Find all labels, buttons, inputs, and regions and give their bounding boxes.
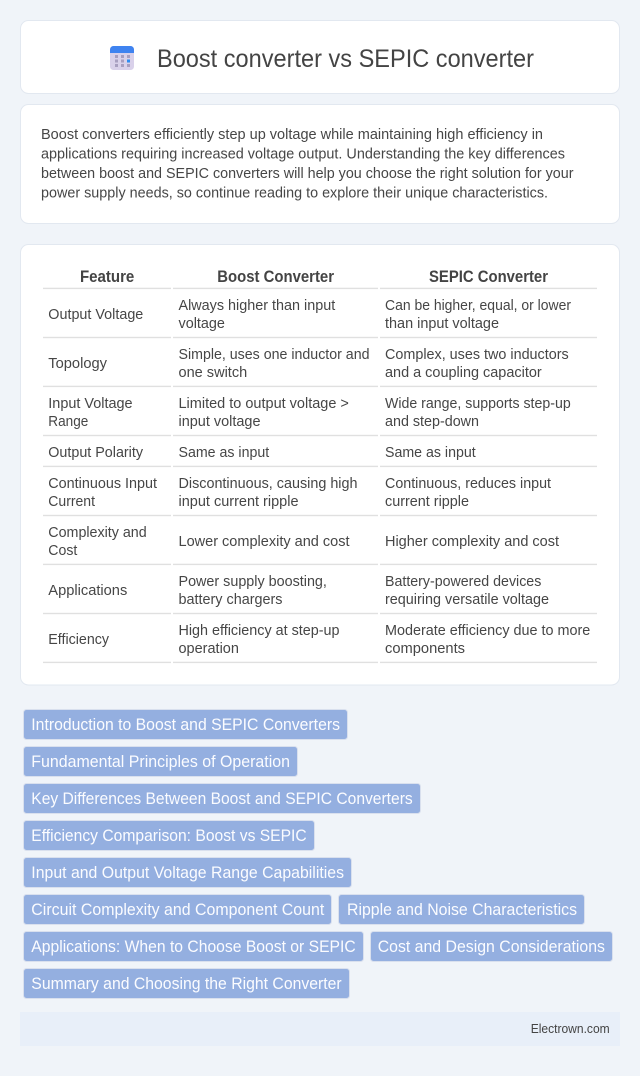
row: input voltage range: Wide range, supports step-up: [385, 396, 571, 412]
footer credit: Electrown.com: [531, 1022, 610, 1036]
row: output voltage: Can be higher, equal, or lower: [385, 298, 571, 314]
row: input voltage range: input voltage: [178, 414, 260, 430]
tag: ripple and noise: [338, 894, 584, 924]
row: applications: [43, 574, 597, 614]
intro text: between boost and SEPIC converters will help you choose the right solution for your: [41, 166, 574, 182]
row: input voltage range: Range: [48, 414, 88, 430]
row: output voltage: Output Voltage: [48, 307, 143, 323]
row: efficiency: Efficiency: [48, 632, 110, 648]
tag: key differences: [24, 784, 420, 814]
row: output polarity: Same as input: [385, 445, 476, 461]
row: efficiency: components: [385, 641, 465, 657]
row: output polarity: [43, 445, 597, 467]
tag: introduction: [24, 710, 348, 740]
table header: SEPIC Converter: [429, 268, 549, 286]
tag: circuit complexity: [24, 894, 332, 924]
tag: cost and design: Cost and Design Considerations: [378, 937, 605, 956]
row: topology: Simple, uses one inductor and: [178, 347, 370, 363]
row: continuous input current: Continuous Input: [48, 476, 157, 492]
tag: efficiency comparison: [24, 820, 314, 850]
row: continuous input current: [43, 476, 597, 516]
row: input voltage range: Limited to output voltage >: [178, 396, 349, 412]
intro text: Boost converters efficiently step up voltage while maintaining high efficiency in: [41, 127, 543, 143]
row: topology: one switch: [178, 365, 247, 381]
row: continuous input current: input current ripple: [178, 494, 298, 510]
row: complexity and cost: Lower complexity and cost: [178, 534, 350, 550]
table header: [43, 268, 597, 289]
intro text: power supply needs, so continue reading to explore their unique characteristics.: [41, 186, 548, 202]
tag: circuit complexity: Circuit Complexity and Component Count: [31, 900, 325, 919]
row: topology: Topology: [48, 356, 108, 372]
row: input voltage range: [43, 396, 597, 436]
row: input voltage range: Input Voltage: [48, 396, 133, 412]
footer: [20, 1012, 620, 1046]
row: output voltage: Always higher than input: [178, 298, 335, 314]
row: efficiency: operation: [178, 641, 239, 657]
row: complexity and cost: [43, 525, 597, 565]
icon: calendar: [110, 46, 134, 70]
row: efficiency: Moderate efficiency due to more: [385, 623, 590, 639]
row: continuous input current: Discontinuous, causing high: [178, 476, 358, 492]
tag: summary: Summary and Choosing the Right Converter: [31, 974, 342, 993]
row: input voltage range: and step-down: [385, 414, 479, 430]
tag: introduction: Introduction to Boost and SEPIC Converters: [31, 715, 340, 734]
row: complexity and cost: Cost: [48, 543, 77, 559]
row: continuous input current: Current: [48, 494, 95, 510]
row: topology: and a coupling capacitor: [385, 365, 542, 381]
intro text: applications requiring increased voltage output. Understanding the key differences: [41, 146, 565, 162]
tag: voltage range: [24, 858, 352, 888]
row: applications: requiring versatile voltage: [385, 592, 549, 608]
tag: key differences: Key Differences Between Boost and SEPIC Converters: [31, 789, 413, 808]
table header: Boost Converter: [217, 268, 335, 286]
intro text: [41, 127, 574, 202]
tag: fundamentals: [24, 746, 298, 776]
row: continuous input current: Continuous, reduces input: [385, 476, 551, 492]
row: applications: battery chargers: [178, 592, 282, 608]
panel: comparison table: [20, 244, 620, 685]
row: applications: Battery-powered devices: [385, 574, 541, 590]
row: topology: Complex, uses two inductors: [385, 347, 569, 363]
row: output voltage: voltage: [178, 316, 225, 332]
row: output polarity: Same as input: [178, 445, 269, 461]
title: Boost converter vs SEPIC converter: [157, 46, 534, 73]
tag: ripple and noise: Ripple and Noise Characteristics: [347, 900, 577, 919]
tag: efficiency comparison: Efficiency Comparison: Boost vs SEPIC: [31, 826, 307, 845]
tag: voltage range: Input and Output Voltage Range Capabilities: [31, 863, 344, 882]
row: applications: Applications: [48, 583, 127, 599]
row: continuous input current: current ripple: [385, 494, 469, 510]
table header: Feature: [80, 268, 134, 286]
row: output voltage: than input voltage: [385, 316, 499, 332]
row: efficiency: High efficiency at step-up: [178, 623, 340, 639]
tag: cost and design: [370, 932, 612, 962]
row: complexity and cost: Higher complexity and cost: [385, 534, 559, 550]
tag: fundamentals: Fundamental Principles of Operation: [31, 752, 290, 771]
row: complexity and cost: Complexity and: [48, 525, 147, 541]
row: output polarity: Output Polarity: [48, 445, 144, 461]
row: output voltage: [43, 298, 597, 338]
tag: applications: Applications: When to Choose Boost or SEPIC: [31, 937, 356, 956]
row: applications: Power supply boosting,: [178, 574, 327, 590]
panel: title card: [20, 20, 620, 94]
panel: introduction: [20, 104, 620, 224]
tag: summary: [24, 968, 350, 998]
tag: applications: [24, 932, 364, 962]
row: topology: [43, 347, 597, 387]
row: efficiency: [43, 623, 597, 663]
tag list: section links: [24, 710, 612, 998]
